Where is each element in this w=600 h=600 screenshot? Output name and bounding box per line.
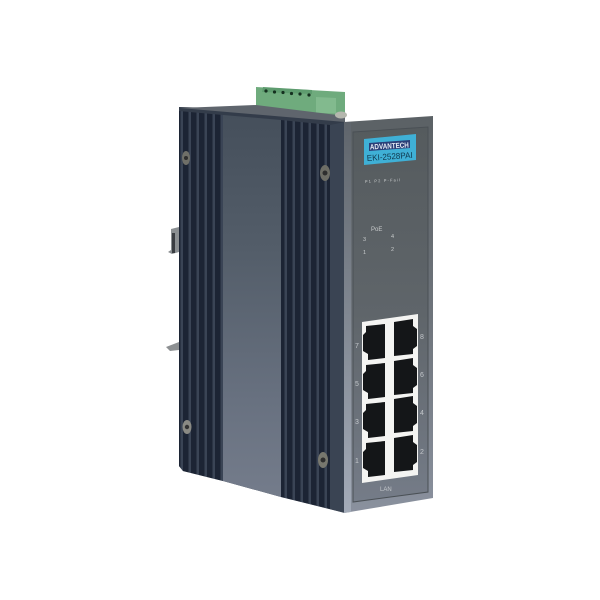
terminal screw holes <box>264 89 311 97</box>
PoE LED labels: PoE <box>371 227 382 233</box>
centre smooth panel <box>223 115 281 497</box>
port numbers: 5 <box>355 381 359 388</box>
PoE LED labels: 4 <box>391 234 394 240</box>
solid strip near the corner <box>330 122 345 513</box>
port numbers: 7 <box>355 343 359 350</box>
RJ45 ports <box>363 319 417 477</box>
port numbers: 8 <box>420 334 424 341</box>
right cooling fins <box>281 120 330 509</box>
port numbers: 3 <box>355 419 359 426</box>
PoE LED labels: 3 <box>363 237 366 243</box>
top mounting screw <box>335 112 347 118</box>
LAN port block <box>362 314 418 483</box>
PoE LED labels: 1 <box>363 250 366 256</box>
side of switch body <box>179 105 345 513</box>
port numbers: 2 <box>420 449 424 456</box>
port numbers: 4 <box>420 410 424 417</box>
model label: EKI-2528PAI <box>366 150 413 163</box>
side screws <box>182 151 330 468</box>
port numbers: 1 <box>355 458 359 465</box>
model label <box>364 134 416 165</box>
front panel <box>344 116 433 513</box>
PoE LED labels <box>363 227 394 256</box>
LAN caption: LAN <box>380 487 392 493</box>
model label: ADVANTECH <box>370 140 409 151</box>
PoE LED labels: 2 <box>391 247 394 253</box>
port numbers: 6 <box>420 372 424 379</box>
left cooling fins <box>179 111 223 481</box>
terminal block connector <box>256 87 345 119</box>
port numbers <box>355 334 424 465</box>
power LED labels: P1 P2 P-Fail <box>365 177 400 184</box>
DIN rail clip <box>166 227 179 351</box>
